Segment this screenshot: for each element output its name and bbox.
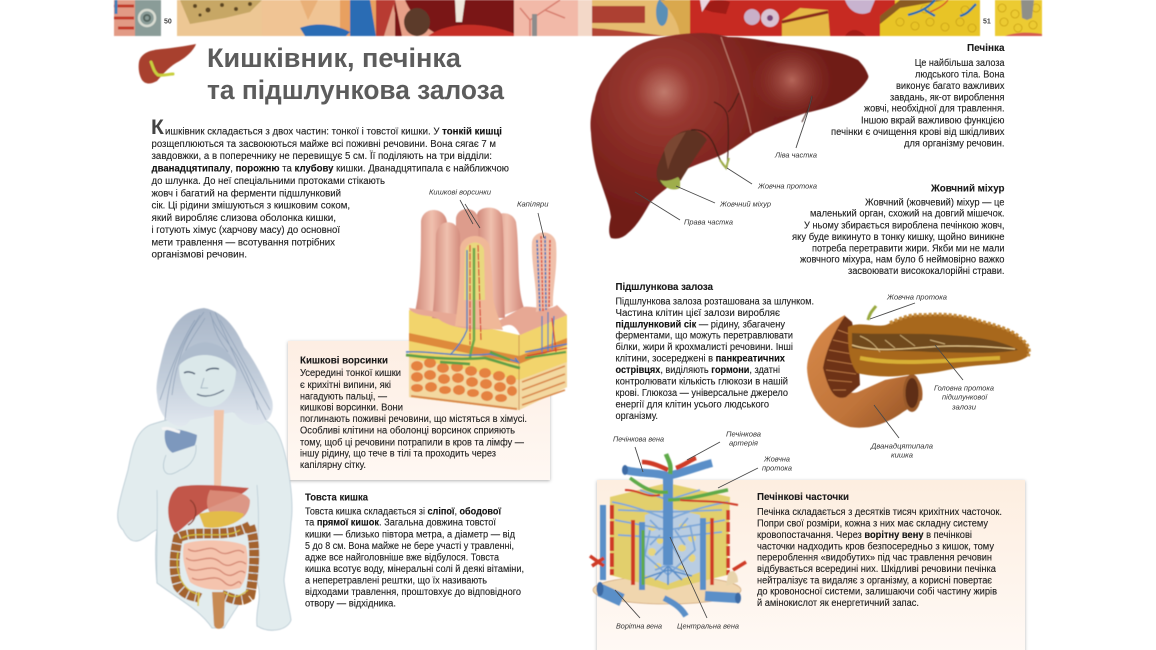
intro text block: завдовжки, а в поперечнику не перевищує 5 см. Її поділяють на три відділи: (152, 150, 492, 162)
label: portal vein: Ворітна вена (616, 622, 662, 630)
text: pancreas body (616, 296, 814, 422)
small intestine (183, 540, 248, 590)
text: villi body: кишкові ворсинки. Вони (300, 403, 403, 414)
text: liver: Іншою вкрай важливою функцією (861, 114, 1005, 126)
label: main pancreatic duct (934, 386, 994, 412)
label: bile duct: Жовчна протока (757, 184, 817, 190)
intro text block: до шлунка. До неї спеціальними протоками стікають (152, 176, 385, 187)
label: duodenum (870, 442, 933, 460)
bread and hand (165, 429, 197, 455)
text: pancreas body: ферментами, що можуть перетравлювати (616, 330, 793, 342)
intro text block: і готують хімус (харчову масу) до основної (152, 225, 340, 236)
text: pancreas body: Підшлункова залоза розташована за шлунком. (616, 296, 814, 307)
text: gall bladder: Жовчний міхур (930, 184, 1004, 194)
text: large intestine body: та прямої кишок. Загальна довжина товстої (305, 518, 496, 529)
text: villi body: є крихітні випини, які (300, 380, 391, 391)
text: liver: печінки є очищення крові від шкідливих (831, 127, 1004, 138)
label: hepatic artery: артерія (729, 440, 758, 448)
text: villi body: Особливі клітини на оболонці ворсинок сприяють (300, 425, 515, 437)
intro text block: організмові речовин. (152, 250, 247, 260)
heading: pancreas: Підшлункова залоза (616, 282, 713, 293)
text: pancreas body: крові. Глюкоза — універсальне джерело (616, 388, 788, 399)
liver pointer lines (635, 96, 812, 220)
text: liver: людського тіла. Вона (915, 69, 1005, 80)
text: liver lobules body: й амінокислот як енергетичний запас. (757, 598, 919, 609)
text: large intestine body (305, 505, 524, 610)
intro text block: К (151, 116, 164, 139)
heading: intestinal villi: Кишкові ворсинки (300, 355, 388, 366)
text: gall bladder: маленький орган, схожий на довгий мішечок. (810, 208, 1004, 220)
illustration: intestinal villi block (406, 188, 567, 410)
intro text block: дванадцятипалу, порожню та клубову кишки. Дванадцятипала є найближчою (152, 162, 509, 174)
illustration: girl with digestive organs (118, 308, 292, 630)
intro text block (151, 116, 509, 260)
text: large intestine body: кишки — близько півтора метра, а діаметр — від (305, 528, 515, 540)
text: large intestine body: 5 до 8 см. Вона майже не бере участі у травленні, (305, 540, 514, 552)
text: large intestine body: отвору — відхідника. (305, 599, 396, 610)
title (207, 43, 505, 105)
label: capillaries: Капіляри (517, 200, 549, 208)
label: intestinal villi: Кишкові ворсинки (429, 188, 491, 196)
top illustration strip (114, 0, 1042, 36)
heading: liver lobules: Печінкові часточки (757, 492, 849, 503)
text: gall bladder: жовчного міхура, нам було б неймовірно важко (800, 254, 1005, 266)
label: bile duct (762, 456, 792, 472)
text: gall bladder (792, 184, 1005, 277)
text: large intestine body: відходами травлення, проштовхує до відповідного (305, 587, 521, 598)
text: liver lobules body: часточки надходить кров безпосередньо з кишок, тому (757, 540, 994, 552)
text: liver: Печінка (967, 43, 1005, 54)
text: liver: Це найбільша залоза (915, 57, 1005, 69)
text: pancreas body: острівцях, виділяють гормони, здатні (616, 365, 780, 376)
text: large intestine body: адже все найголовніше вже відбулося. Товста (305, 552, 499, 564)
label: main pancreatic duct: залози (951, 404, 976, 412)
label: hepatic vein: Печінкова вена (613, 436, 664, 444)
text: pancreas (616, 282, 814, 422)
pancreas pointer lines (870, 303, 963, 438)
title: Кишківник, печінка (207, 43, 462, 73)
text: liver lobules body: Попри свої розміри, кожна з них має складну систему (757, 519, 988, 530)
illustration: liver lobule (590, 430, 792, 630)
label: bile duct: протока (762, 466, 792, 472)
text: gall bladder: яку буде викинуто в тонку кишку, щойно виникне (792, 231, 1005, 243)
intro text block: сік. Ці рідини змішуються з кишковим соком, (152, 200, 350, 212)
text: large intestine (305, 492, 524, 610)
title: та підшлункова залоза (207, 75, 505, 105)
text: liver: для організму речовин. (904, 138, 1004, 150)
icon: small liver with gall bladder (139, 44, 196, 84)
text: gall bladder: потреба перетравити жири. Якби ми не мали (812, 242, 1004, 254)
intro text block: ишківник складається з двох частин: тонкої і товстої кишки. У тонкій кишці (165, 126, 502, 138)
label: duodenum: Дванадцятипала (870, 442, 933, 450)
text: pancreas body: організму. (616, 411, 658, 422)
lobule pointer lines (615, 442, 758, 618)
label: main pancreatic duct: підшлункової (942, 394, 989, 402)
villi fingers (490, 213, 524, 320)
text: liver lobules body: Печінка складається з десятків тисяч крихітних часточок. (757, 507, 1002, 518)
villi pointer lines (460, 200, 544, 238)
text: pancreas body: клітини, зосереджені в панкреатичних (616, 354, 785, 365)
heading: large intestine: Товста кишка (305, 492, 368, 503)
hair (156, 308, 273, 426)
text: pancreas body: контролювати кількість глюкози в нашій (616, 376, 788, 387)
text: liver lobules body (757, 507, 1002, 609)
text: villi body: Усередині тонкої кишки (300, 368, 401, 379)
text: villi body: нагадують пальці, — (300, 391, 387, 402)
text: liver lobules body: до кровоносної системи, залишаючи собі частину жирів (757, 586, 997, 598)
text: gall bladder: У ньому збирається вироблена печінкою жовч, (804, 219, 1004, 231)
intro text block: який виробляє слизова оболонка кишки, (152, 212, 336, 224)
label: main pancreatic duct: Головна протока (934, 386, 994, 392)
text: liver: завдань, як-от вироблення (890, 91, 1004, 103)
rectum (212, 592, 225, 629)
text: pancreas body: білки, жири й крохмалисті речовини. Інші (616, 341, 793, 353)
text: villi body: капілярну сітку. (300, 460, 366, 471)
text: villi body (300, 368, 527, 471)
text: liver lobules body: відбувається всередині них. Шкідливі речовини печінка (757, 563, 996, 575)
label: central vein: Центральна вена (677, 624, 739, 630)
text: liver (831, 43, 1005, 150)
page number 51: 51 (983, 18, 991, 26)
intro text block: розщеплюються та засвоюються майже всі поживні речовини. Вона сягає 7 м (152, 139, 496, 150)
text: liver: виконує багато важливих (896, 80, 1004, 92)
text: liver lobules body: перероблення «видобутих» під час травлення речовин (757, 552, 992, 564)
esophagus (214, 410, 224, 487)
intro text block: жовч і багатий на ферменти підшлунковий (152, 188, 341, 200)
label: hepatic artery (726, 430, 761, 448)
text: villi body: поглинають поживні речовини, що містяться в хімусі. (300, 414, 527, 425)
pancreas (199, 511, 244, 528)
panel: liver lobules (597, 480, 1025, 650)
page number 50: 50 (164, 18, 172, 26)
text: gall bladder: Жовчний (жовчевий) міхур — це (865, 197, 1005, 208)
label: gall bladder: Жовчний міхур (719, 200, 771, 208)
text: pancreas body: підшлунковий сік — рідину, збагачену (616, 318, 785, 330)
illustration: pancreas and duodenum (807, 294, 1029, 460)
text: liver lobules body: нейтралізує та видаляє з організму, а корисні повертає (757, 575, 992, 586)
text: villi body: іншу рідину, що тече в тілі та проходить через (300, 449, 496, 460)
stomach (207, 490, 250, 521)
text: large intestine body: кишка всотує воду, мінеральні солі й деякі вітаміни, (305, 564, 524, 575)
text: large intestine body: Товста кишка складається зі сліпої, ободової (305, 505, 501, 517)
text: liver: жовчі, необхідної для травлення. (864, 102, 1004, 114)
text: liver lobules body: кровопостачання. Через ворітну вену в печінкові (757, 530, 972, 541)
text: gall bladder: засвоювати висококалорійні страви. (848, 266, 1004, 277)
illustration: large liver (590, 33, 868, 239)
label: duodenum: кишка (891, 452, 913, 460)
panel: intestinal villi (288, 341, 550, 480)
label: bile duct: Жовчна (763, 456, 790, 464)
intro text block: мети травлення — всотування потрібних (152, 236, 335, 248)
text: pancreas body: Частина клітин цієї залози виробляє (616, 307, 780, 319)
text: villi body: тому, щоб ці речовини потрапили в кров та лімфу — (300, 436, 524, 448)
liver (168, 485, 249, 533)
text: large intestine body: а неперетравлені рештки, що їх називають (305, 576, 487, 587)
label: right lobe: Права частка (684, 220, 733, 226)
label: left lobe: Ліва частка (774, 152, 817, 160)
text: pancreas body: енергії для клітин усього людського (616, 399, 769, 410)
large intestine (175, 526, 254, 600)
label: bile duct: Жовчна протока (886, 294, 947, 302)
label: hepatic artery: Печінкова (726, 430, 761, 438)
